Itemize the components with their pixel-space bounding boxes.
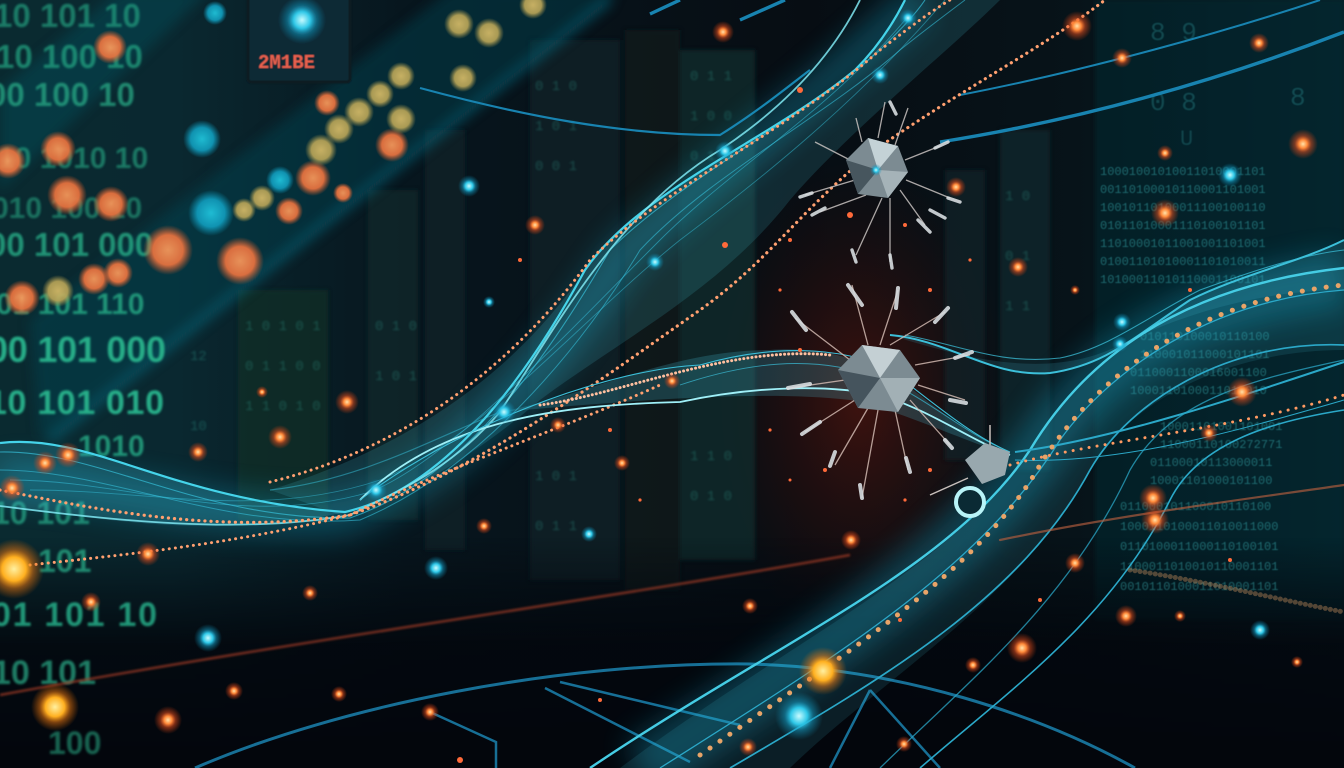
binary text: centre columns: 0 1 1 [535,519,577,535]
binary text: right wall: 01011010001110100101101 [1100,219,1266,233]
binary text: right wall: 01001101010001101010011 [1100,255,1266,269]
binary text: centre columns: 1 0 1 [375,369,417,385]
binary text: right wall: 110001011000101101 [1140,348,1270,362]
binary text: right wall: 1000110100011010010 [1130,384,1267,398]
binary text: right wall: 0110001100016001100 [1130,366,1267,380]
red line [0,555,850,695]
binary text: right wall: 8 9 [1150,18,1197,48]
dots: fine red dust around molecules [457,87,1232,763]
binary text: right wall: 10001001010011010001101 [1100,165,1266,179]
binary text: left wall [0,0,166,761]
binary text: right wall: U [1180,127,1193,152]
binary text: centre columns: 0 1 [1005,249,1030,265]
binary text: right wall: 011000101100010110100 [1120,500,1271,514]
binary text: centre columns: 1 0 1 [535,119,577,135]
binary text: centre columns: 0 1 0 [535,79,577,95]
binary text: left wall: 10 100 10 [0,38,143,75]
dots: glowing cyan nodes [194,9,1270,740]
binary text: centre columns: 1 1 0 1 0 [245,399,321,415]
binary text: centre columns: 1 0 1 [535,469,577,485]
binary text: centre columns: 0 1 0 [690,149,732,165]
binary text: right wall: 010110100010110100 [1140,330,1270,344]
binary text: centre columns: 1 0 [1005,189,1030,205]
binary text: right wall: 00110100010110001101001 [1100,183,1266,197]
molecule: upper [800,102,960,268]
binary text: centre columns: 0 0 1 [535,159,577,175]
binary text: right wall: 1000110100011010011000 [1120,520,1278,534]
binary text: left wall: 10 1010 10 [0,142,148,175]
binary text: centre columns: 0 1 1 0 0 [245,359,321,375]
strand: lower right dotted lines [700,285,1344,755]
binary text: left wall: 1010 [78,430,145,463]
strand: dotted orange lines [0,0,1105,565]
binary text: right wall: 10001101000101100 [1150,474,1272,488]
binary text: centre columns: 0 1 0 [690,489,732,505]
binary text: centre columns: 1 0 1 0 1 [245,319,321,335]
binary text: left wall: 01 101 110 [0,288,144,321]
binary text: right wall: 0 8 [1150,88,1197,118]
network arcs: bottom [195,664,1135,768]
binary text: centre columns [190,69,1030,535]
binary text: centre columns: 1 1 [1005,299,1030,315]
binary text: centre columns: 0 1 1 [690,69,732,85]
binary text: right wall: 01100010113000011 [1150,456,1272,470]
binary text: centre columns: 10 [190,419,207,435]
teal wires: upper right [420,0,1344,142]
strand: left and upward ribbon [0,0,965,525]
binary text: centre columns: 12 [190,349,207,365]
binary text: centre columns: 0 1 0 [375,319,417,335]
dots: large blurred left bokeh [0,0,547,316]
binary text: right wall: 8 [1290,83,1306,113]
sign: top left display: 2M1BE [258,52,315,74]
binary text: right wall: 11000110100272771 [1160,438,1282,452]
binary text: right wall: 10010110100011100100110 [1100,201,1266,215]
binary text: centre columns: 1 1 0 [690,449,732,465]
strand: central horizontal ribbon [360,240,1344,500]
binary text: right wall [1100,18,1306,594]
molecule: lower [788,285,972,498]
binary text: centre columns: 1 0 0 [690,109,732,125]
binary text: right wall: 10100011010110001100101 [1100,273,1266,287]
binary text: right wall: 0110100011000110100101 [1120,540,1278,554]
strand: lower right bundle [590,268,1344,768]
server columns: centre [238,0,1344,620]
binary text: right wall: 11010001011001001101001 [1100,237,1266,251]
binary text: right wall: 10001101001101001 [1160,420,1282,434]
binary text: right wall: 1100011010010110001101 [1120,560,1278,574]
molecule: small junction [930,425,1010,495]
diagonal teal bands: upper left [0,0,620,440]
binary text: left wall: 101 [38,543,91,579]
sign: top left display [248,0,350,82]
binary text: left wall: 100 [48,725,101,761]
binary text: right wall: 0010110100011010001101 [1120,580,1278,594]
ring node [956,488,984,516]
